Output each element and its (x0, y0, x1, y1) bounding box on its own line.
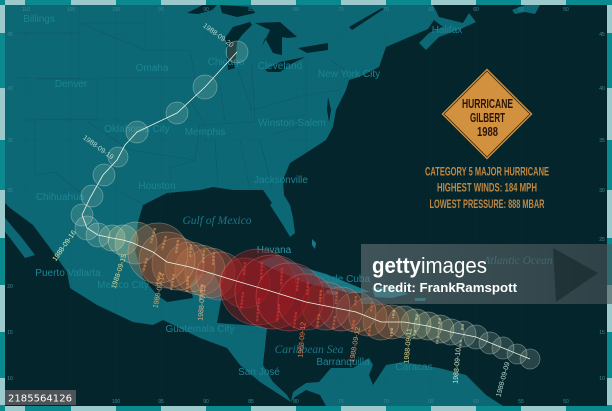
axis tick labels: 60 (473, 399, 479, 405)
info: hurricane statistics: HIGHEST WINDS: 184 MPH (437, 180, 537, 194)
axis tick labels: 70 (383, 399, 389, 405)
axis tick labels: 100 (112, 399, 120, 405)
axis tick labels: 75 (338, 7, 344, 13)
city and sea labels: Mexico City (97, 280, 149, 291)
axis tick labels: 75 (338, 399, 344, 405)
land: North and Central America (5, 5, 476, 402)
city and sea labels: Santiago de Cuba (290, 274, 370, 285)
city and sea labels: Winston-Salem (258, 118, 326, 129)
watermark credit text: Credit: FrankRamspott (373, 281, 518, 295)
city and sea labels: Jacksonville (254, 175, 308, 186)
hurricane track line (82, 52, 530, 359)
city and sea labels: Houston (138, 181, 176, 192)
axis tick labels: 50 (563, 7, 569, 13)
axis tick labels: 35 (599, 138, 605, 144)
axis tick labels: 25 (599, 237, 605, 243)
axis tick labels: 55 (518, 399, 524, 405)
axis tick labels: 40 (7, 86, 13, 92)
axis tick labels: 15 (7, 330, 13, 336)
sign text: GILBERT (470, 110, 505, 125)
city and sea labels: Gulf of Mexico (183, 215, 252, 227)
city and sea labels: Halifax (432, 25, 462, 36)
track date labels: 1988-09-11 (403, 328, 414, 364)
axis tick labels: 85 (248, 399, 254, 405)
city and sea labels: Denver (55, 79, 88, 90)
image id tag (5, 390, 76, 405)
track date labels: 1988-09-19 (81, 134, 115, 161)
axis tick labels: 20 (7, 284, 13, 290)
axis tick labels: 45 (7, 32, 13, 38)
city and sea labels: Barranquilla (316, 357, 370, 368)
info: hurricane warning sign (442, 68, 532, 160)
info: hurricane statistics: LOWEST PRESSURE: 888 MBAR (430, 197, 545, 211)
city and sea labels: Memphis (185, 127, 225, 138)
axis tick labels: 35 (7, 138, 13, 144)
hurricane wind-radius circles (71, 41, 540, 369)
land: Newfoundland (512, 5, 540, 14)
city and sea labels: San José (238, 367, 280, 378)
track date labels: 1988-09-20 (201, 22, 235, 49)
axis tick labels: 105 (67, 7, 75, 13)
axis tick labels: 65 (428, 7, 434, 13)
sign text (462, 96, 513, 139)
axis tick labels: 90 (203, 399, 209, 405)
city and sea labels: Chicago (208, 57, 245, 68)
city and sea labels: Oklahoma City (104, 124, 170, 135)
axis tick labels: 80 (293, 7, 299, 13)
city and sea labels: Cleveland (258, 61, 302, 72)
city and sea labels (23, 14, 553, 378)
axis tick labels: 50 (563, 399, 569, 405)
axis tick labels: 45 (599, 32, 605, 38)
axis tick labels: 55 (518, 7, 524, 13)
axis tick labels: 40 (599, 86, 605, 92)
track date labels: 1988-09-12 (297, 322, 308, 358)
info: hurricane statistics (425, 164, 549, 211)
axis tick labels: 30 (599, 188, 605, 194)
wind marker ticks along track (143, 228, 463, 348)
axis tick labels: 10 (7, 376, 13, 382)
track date labels: 1988-09-09 (496, 361, 512, 398)
land: Cuba (257, 255, 370, 293)
watermark panel (361, 244, 612, 304)
city and sea labels: Chihuahua (36, 192, 85, 203)
axis tick labels: 90 (203, 7, 209, 13)
axis tick labels: 65 (428, 399, 434, 405)
track date labels: 1988-09-15 (111, 253, 128, 290)
axis tick labels: 95 (158, 399, 164, 405)
track date labels: 1988-09-10 (452, 348, 463, 384)
track date labels: 1988-09-12 (349, 326, 362, 363)
land: Hispaniola, Bahamas and islands (312, 239, 426, 301)
axis tick labels: 10 (599, 376, 605, 382)
sign diamond (442, 68, 532, 160)
city and sea labels: Caribbean Sea (275, 344, 344, 356)
city and sea labels: New York City (318, 69, 380, 80)
watermark triangle decoration (553, 248, 598, 302)
city and sea labels: Caracas (395, 362, 433, 373)
track date labels (52, 22, 512, 398)
land: Baja California (5, 218, 35, 258)
city and sea labels: Atlantic Ocean (482, 255, 553, 267)
city and sea labels: Puerto Vallarta (35, 268, 101, 279)
track date labels: 1988-09-16 (52, 229, 78, 263)
axis tick labels: 15 (599, 330, 605, 336)
axis tick labels: 70 (383, 7, 389, 13)
axis tick labels: 100 (112, 7, 120, 13)
axis tick labels: 60 (473, 7, 479, 13)
city and sea labels: Havana (257, 245, 292, 256)
axis tick labels: 80 (293, 399, 299, 405)
image id tag: 2185564126 (8, 394, 72, 404)
city and sea labels: Omaha (136, 63, 169, 74)
track date labels: 1988-09-13 (197, 285, 208, 321)
axis tick labels: 85 (248, 7, 254, 13)
track date labels: 1988-09-14 (152, 272, 167, 309)
axis tick labels: 110 (22, 7, 30, 13)
city and sea labels: Billings (23, 14, 55, 25)
sign text: HURRICANE (462, 96, 513, 111)
land: South America (291, 358, 503, 406)
axis tick labels: 30 (7, 188, 13, 194)
water: Great Lakes and St Lawrence (187, 5, 384, 122)
watermark logo text: gettyimages (372, 253, 487, 278)
state borders (5, 5, 345, 205)
city and sea labels: Guatemala City (166, 324, 234, 335)
axis tick labels: 95 (158, 7, 164, 13)
sign text: 1988 (477, 124, 498, 139)
